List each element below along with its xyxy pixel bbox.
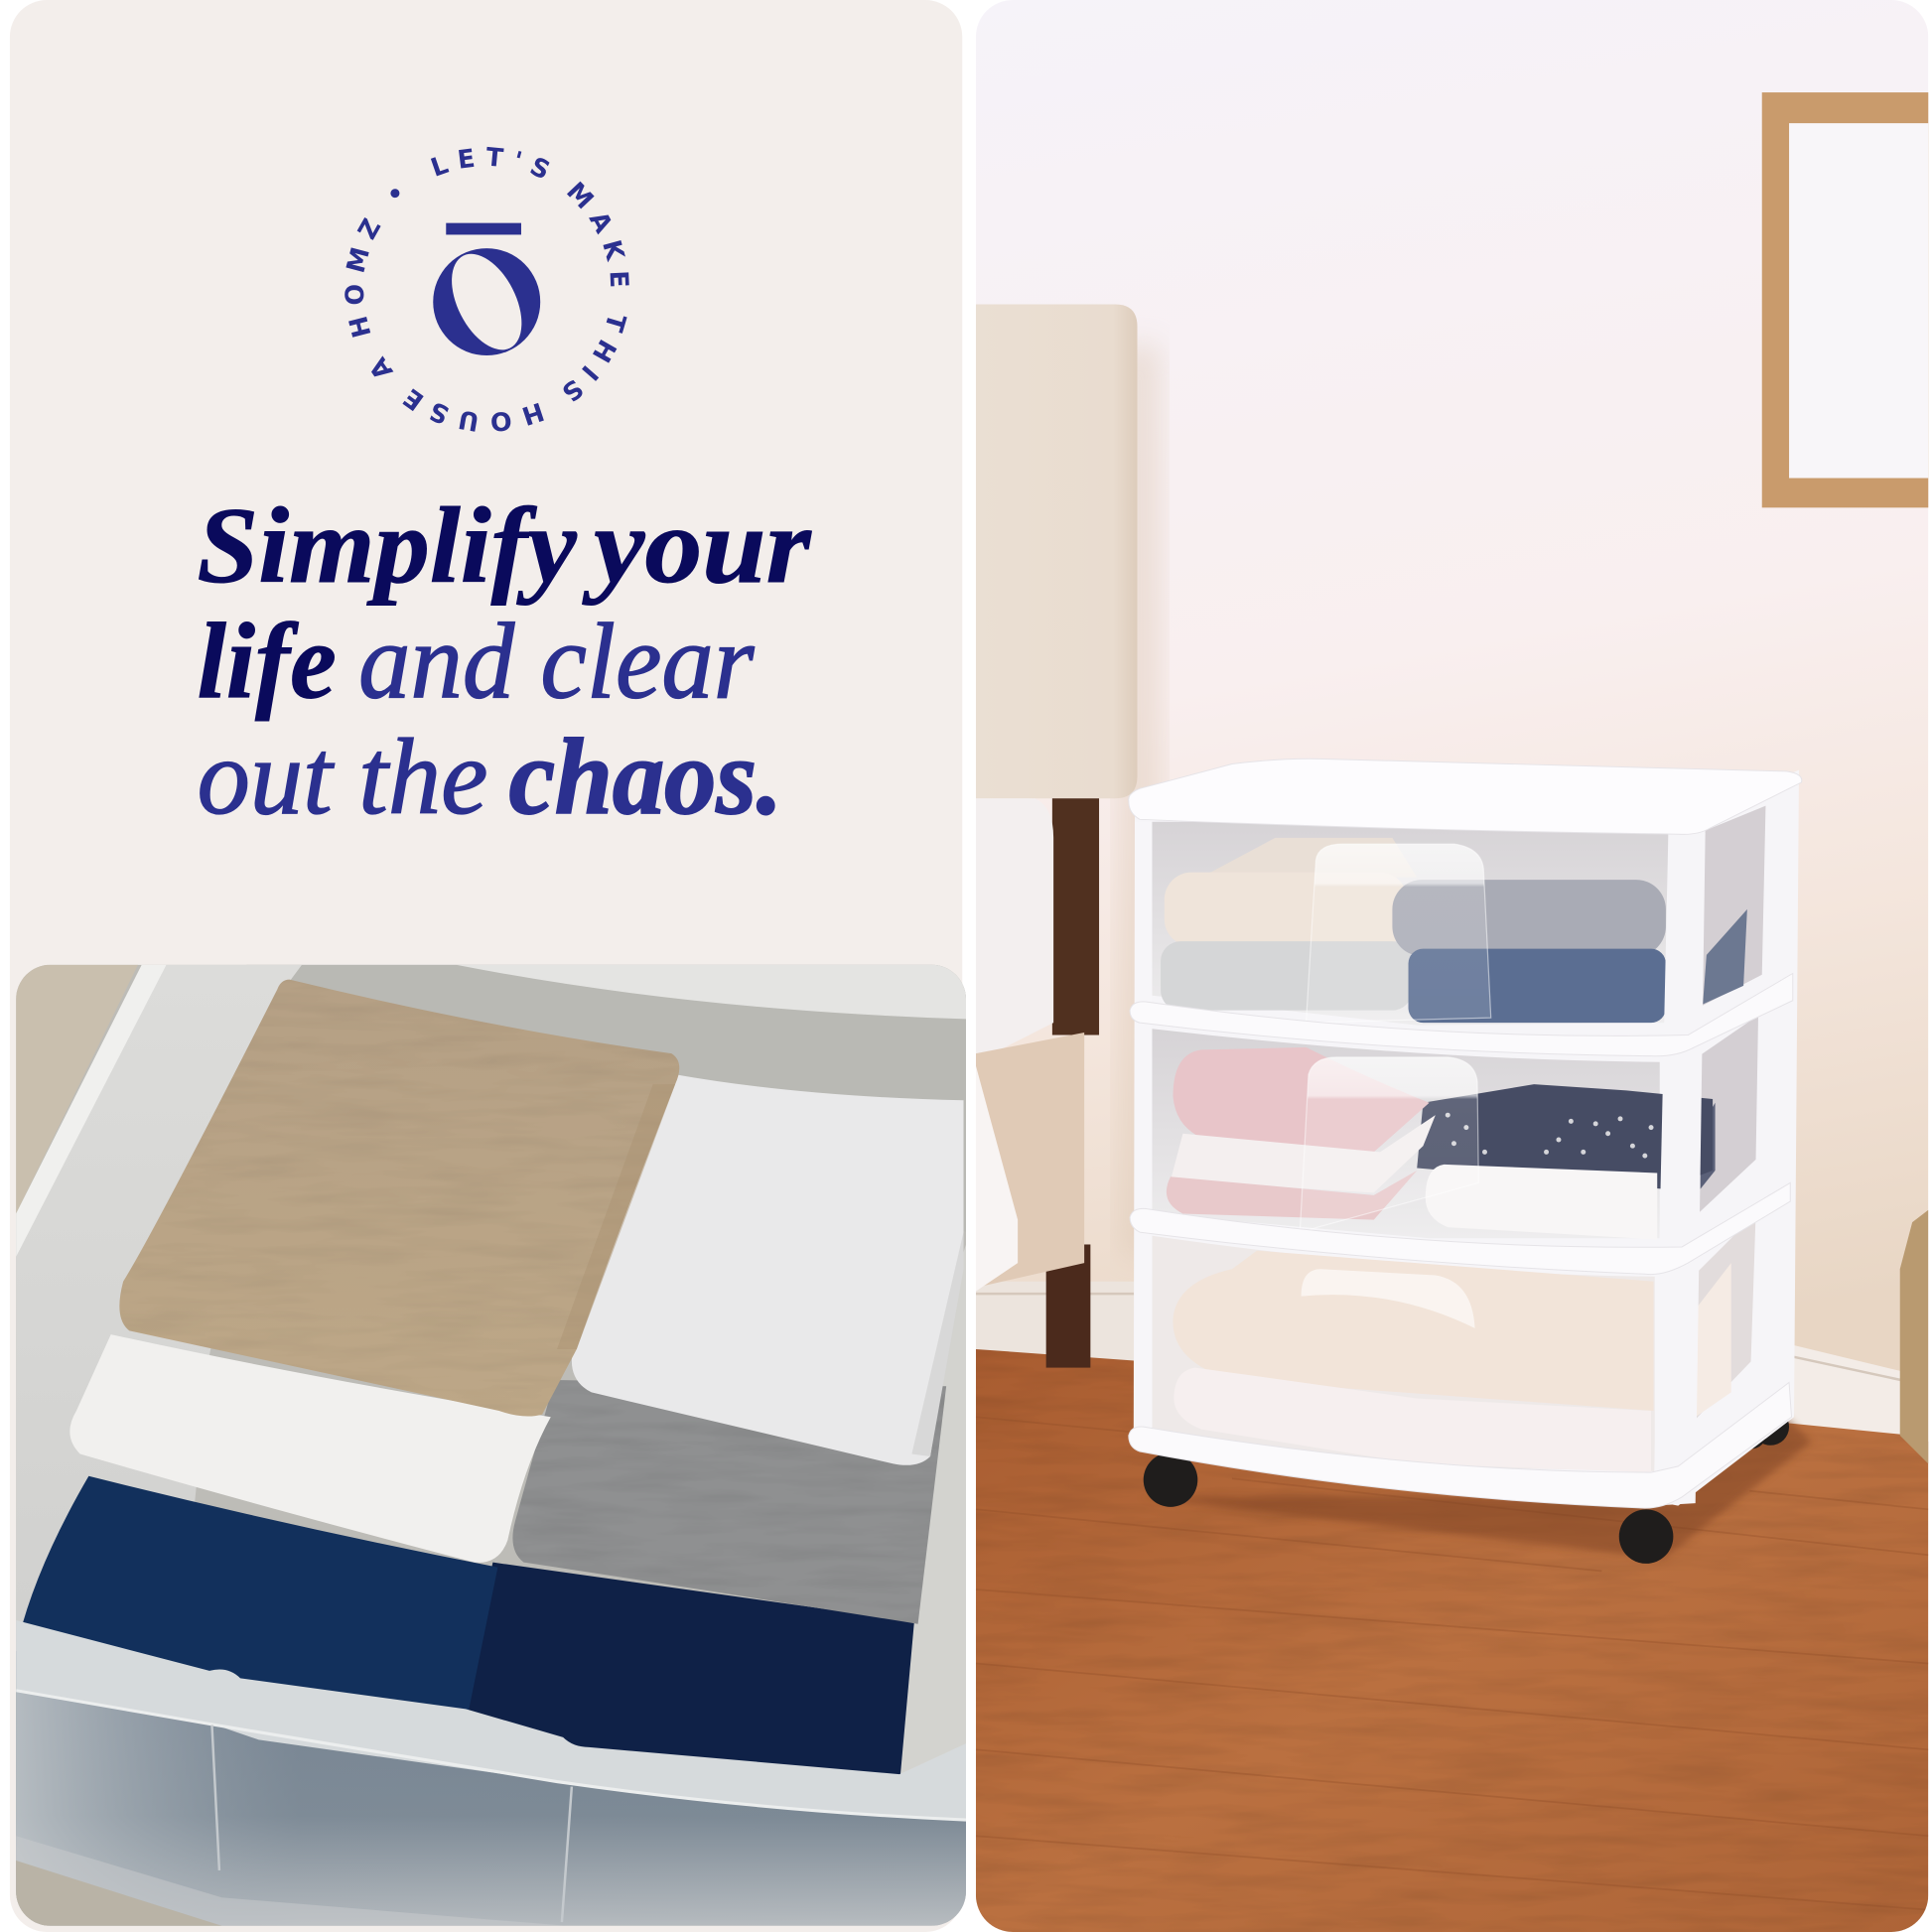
drawer 1 xyxy=(1152,822,1668,1026)
heading line 2: life xyxy=(198,601,337,721)
cream folded towel xyxy=(1165,838,1417,946)
handle xyxy=(1302,1269,1475,1328)
wall xyxy=(976,0,1928,1442)
heading line 1: your xyxy=(583,485,812,606)
mattress xyxy=(976,798,1053,1062)
white blanket xyxy=(1173,1368,1651,1472)
shelf rail 2 xyxy=(1130,1182,1790,1275)
cart floor shadow xyxy=(1140,1417,1811,1559)
frosted left drawer wall xyxy=(16,965,302,1622)
cart body xyxy=(1134,770,1799,1506)
dark dotted fabric xyxy=(1417,1084,1713,1189)
right drawer wall xyxy=(900,1245,966,1773)
plastic drawer cart xyxy=(1129,759,1802,1508)
heading xyxy=(198,485,812,837)
logo macron bar xyxy=(446,223,521,234)
white folded shirt, upper right xyxy=(572,1074,964,1465)
heading line 1: Simplify xyxy=(198,485,577,606)
beige wall behind the drawer xyxy=(16,965,138,1213)
heading line 3 xyxy=(198,717,782,837)
handle xyxy=(1300,1057,1478,1232)
lid xyxy=(1129,759,1802,834)
drawer 3 xyxy=(1152,1236,1655,1472)
photo: folded clothes in a frosted drawer xyxy=(16,965,966,1926)
bed base xyxy=(976,1033,1084,1288)
front left post xyxy=(1135,822,1152,1436)
drawer lid edge xyxy=(456,965,966,1019)
navy folded shirt, right xyxy=(469,1563,914,1775)
drawer 2 xyxy=(1152,1029,1713,1240)
drawer back shading xyxy=(247,965,966,996)
base rail xyxy=(1129,1382,1792,1508)
heading line 2 xyxy=(198,601,755,721)
bed headboard xyxy=(976,305,1138,798)
photo: bedroom with three-drawer cart xyxy=(976,0,1932,1932)
soft shadow behind the headboard xyxy=(1121,345,1159,1257)
grey folded towel xyxy=(1161,941,1412,1011)
pink folded shirt xyxy=(1173,1047,1430,1152)
bed post xyxy=(1046,798,1099,1368)
heading line 3: out the xyxy=(198,717,487,837)
side windows xyxy=(1694,806,1765,1421)
logo: circular badge xyxy=(345,147,629,432)
shelf rail 1 xyxy=(1130,973,1793,1056)
heading line 1 xyxy=(198,485,812,606)
frosted drawer front xyxy=(16,1620,966,1926)
tan folded sweater xyxy=(119,980,679,1417)
handle xyxy=(1307,844,1491,1023)
panel: left cream card xyxy=(10,0,962,1932)
baseboards xyxy=(976,1282,1912,1440)
white folded towel xyxy=(1426,1165,1657,1240)
navy folded shirt, left xyxy=(23,1475,498,1710)
heading line 2: and clear xyxy=(358,601,755,721)
bed sheet xyxy=(976,1066,1018,1292)
white folded shirt, lower left xyxy=(69,1334,551,1563)
logo ring text: LET'S MAKE THIS HOUSE A HOMZ • xyxy=(345,147,629,432)
blue folded towel xyxy=(1409,949,1666,1023)
basket xyxy=(1900,1210,1928,1463)
pink folded stack xyxy=(1167,1171,1417,1220)
cream blanket xyxy=(1173,1251,1654,1411)
picture frame xyxy=(1762,92,1932,507)
white and lilac stack xyxy=(1171,1115,1436,1192)
grey-lilac folded towel xyxy=(1392,880,1666,956)
logo letter o xyxy=(433,242,540,361)
grey folded shirt xyxy=(512,1380,946,1624)
wheels xyxy=(1144,1409,1789,1564)
front right post xyxy=(1654,833,1706,1506)
wood floor xyxy=(976,1349,1928,1932)
heading line 3: chaos. xyxy=(509,717,782,837)
